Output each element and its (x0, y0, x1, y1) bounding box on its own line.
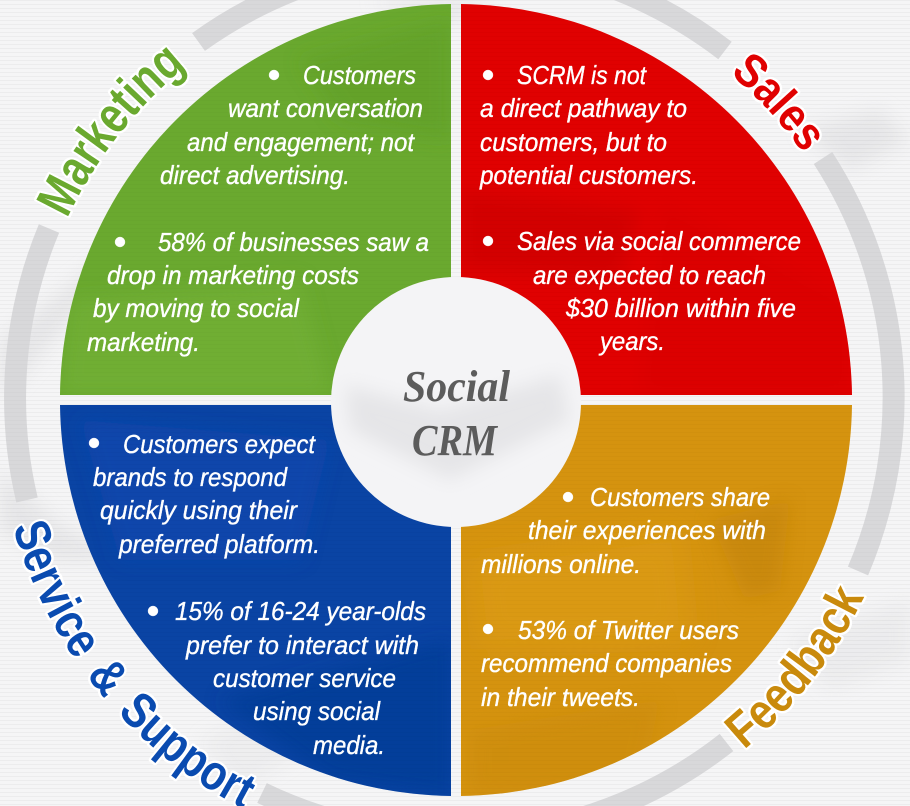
text block: feedback: their experiences with (528, 515, 766, 545)
text block: feedback: millions online. (481, 549, 641, 579)
text block: marketing: Customers (303, 60, 416, 90)
text block: feedback: recommend companies (481, 648, 732, 678)
text block: service and support: quickly using their (100, 495, 298, 525)
centre title: Social (403, 362, 511, 411)
panel: service and support quadrant (60, 405, 451, 796)
text block: marketing: want conversation (228, 93, 423, 123)
text block: sales: a direct pathway to (480, 93, 687, 123)
text block: service and support: preferred platform. (118, 529, 320, 559)
text block: service and support: Customers expect (123, 429, 317, 459)
text block: sales (479, 60, 801, 356)
text block: sales: SCRM is not (517, 60, 648, 90)
text block: service and support: using social (253, 696, 381, 726)
text block: marketing: marketing. (87, 327, 200, 357)
text block: sales: potential customers. (479, 160, 698, 190)
text block: feedback: Customers share (590, 482, 770, 512)
text block: service and support: prefer to interact with (185, 630, 419, 660)
text block: sales: are expected to reach (533, 260, 766, 290)
panel: marketing quadrant (60, 4, 451, 395)
label: Sales: Sales (732, 52, 822, 152)
centre circle (331, 277, 581, 527)
centre title: CRM (412, 416, 499, 465)
text block: service and support: brands to respond (93, 462, 288, 492)
text block: feedback (481, 482, 770, 712)
text block: marketing: direct advertising. (160, 160, 350, 190)
text block: marketing: by moving to social (93, 293, 300, 323)
text block: marketing: 58% of businesses saw a (158, 227, 429, 257)
text block: sales: years. (598, 326, 665, 356)
text block: service and support: 15% of 16-24 year-olds (175, 596, 426, 626)
text block: feedback: in their tweets. (481, 682, 640, 712)
label: Marketing: Marketing (34, 45, 190, 218)
text block: sales: customers, but to (480, 127, 667, 157)
text block: marketing: and engagement; not (187, 127, 416, 157)
text block: marketing (87, 60, 429, 357)
text block: service and support: media. (313, 730, 385, 760)
centre title (403, 362, 511, 465)
text block: service and support: customer service (213, 663, 396, 693)
text block: marketing: drop in marketing costs (107, 260, 359, 290)
text block: sales: Sales via social commerce (517, 226, 801, 256)
text block: sales: $30 billion within five (565, 293, 796, 323)
panel: feedback quadrant (461, 405, 852, 796)
text block: service and support (89, 429, 426, 760)
text block: feedback: 53% of Twitter users (518, 615, 739, 645)
panel: sales quadrant (461, 4, 852, 395)
label: Feedback: Feedback (722, 583, 867, 750)
